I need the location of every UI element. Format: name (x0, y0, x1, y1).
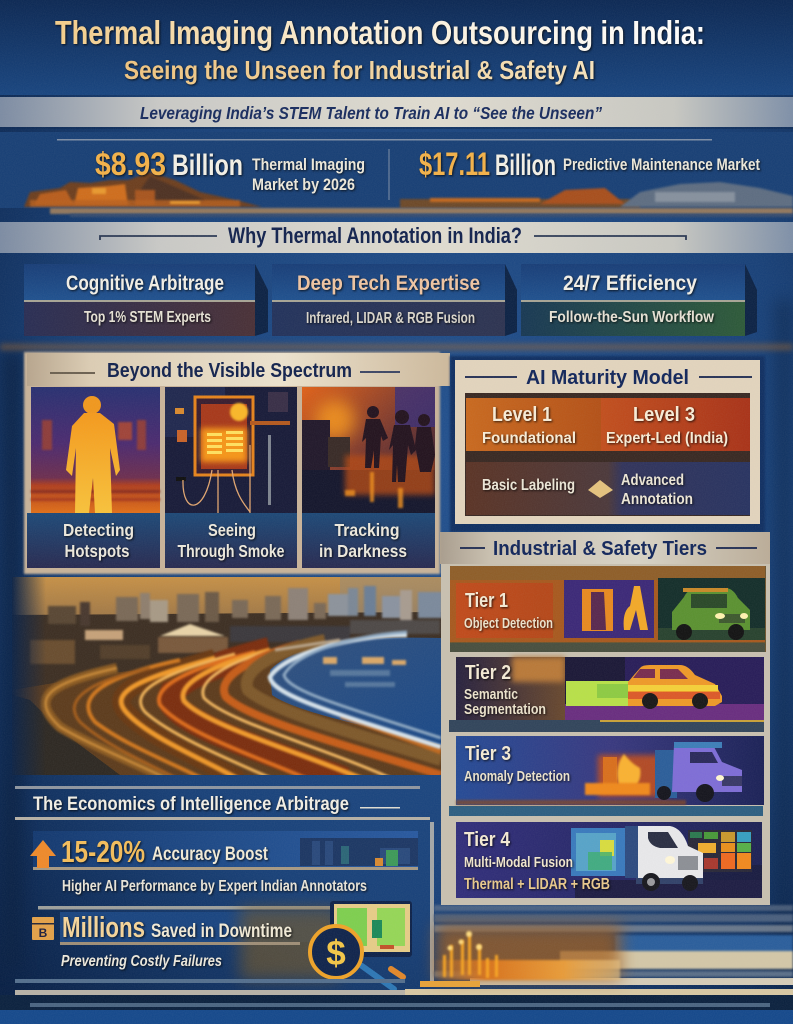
level 1 cell (466, 398, 601, 451)
comparison row: Annotation (621, 491, 693, 508)
stat: predictive maintenance market: $17.11 (419, 146, 490, 182)
thermal image: people in darkness (302, 387, 435, 513)
stat: thermal imaging market: Market by 2026 (252, 175, 355, 194)
market stats strip (0, 132, 793, 217)
subtitle: Seeing the Unseen for Industrial & Safety AI (124, 55, 595, 85)
stat: thermal imaging market (95, 146, 365, 194)
stat: predictive maintenance market: Billion (495, 149, 556, 182)
tier 3: Tier 3 (465, 743, 511, 765)
tier 2: Segmentation (464, 702, 546, 718)
section heading: economics of intelligence arbitrage: The Economics of Intelligence Arbitrage (33, 794, 349, 815)
comparison row (466, 462, 750, 515)
tier 2 (449, 657, 764, 732)
panel: accuracy boost: Higher AI Performance by Expert Indian Annotators (62, 878, 367, 895)
left edge fade (12, 577, 46, 775)
thermal skyline right (400, 182, 793, 208)
stat: thermal imaging market: Thermal Imaging (252, 155, 365, 174)
panel: millions saved in downtime: Preventing Costly Failures (61, 953, 222, 970)
tier 1 (450, 566, 765, 652)
level 3 cell: Level 3 (633, 404, 695, 426)
purple truck (655, 742, 742, 802)
tier 4: Thermal + LIDAR + RGB (464, 876, 610, 893)
icon: magnifying glass with dollar (310, 926, 403, 989)
panel: deep tech expertise: Deep Tech Expertise (297, 272, 480, 295)
caption: seeing through smoke (165, 513, 297, 568)
tier 2: Semantic (464, 687, 518, 703)
thermal image: person (31, 387, 160, 513)
panel: deep tech expertise (272, 264, 517, 336)
section heading: economics of intelligence arbitrage (15, 786, 430, 820)
panel: 24/7 efficiency: 24/7 Efficiency (563, 272, 697, 295)
comparison row: Basic Labeling (482, 477, 575, 494)
stat: thermal imaging market: Billion (172, 149, 243, 182)
panel: ai maturity model (450, 356, 765, 532)
caption: seeing through smoke: Through Smoke (178, 541, 285, 561)
mid-ground city (12, 612, 441, 690)
tier 1: Tier 1 (465, 590, 508, 612)
tagline banner (0, 97, 793, 129)
icon: monitor with floor plan (330, 901, 412, 957)
thermal bar chart decoration (420, 905, 793, 987)
icon: magnifying glass with dollar: $ (326, 934, 346, 973)
heading: AI Maturity Model (526, 366, 689, 389)
panel: cognitive arbitrage: Top 1% STEM Experts (84, 309, 211, 326)
caption: tracking in darkness (302, 513, 435, 568)
thermal people thumbnail (564, 580, 654, 638)
fire and equipment (585, 754, 668, 797)
tier 1: Object Detection (464, 616, 553, 632)
panel: accuracy boost: 15-20% (61, 834, 145, 869)
panel: tiers frame (441, 564, 770, 905)
caption: detecting hotspots (27, 513, 160, 568)
tagline banner: Leveraging India’s STEM Talent to Train AI to “See the Unseen” (140, 103, 602, 123)
tier 2: Tier 2 (465, 662, 511, 684)
dark foreground (12, 695, 120, 775)
thermal image: electrical panel (165, 387, 297, 513)
panel: millions saved in downtime: Saved in Downtime (151, 921, 292, 942)
color grid display (688, 830, 752, 872)
panel: millions saved in downtime: Millions (62, 912, 145, 944)
panel: deep tech expertise: Infrared, LIDAR & RGB Fusion (306, 310, 475, 327)
panel: 24/7 efficiency: Follow-the-Sun Workflow (549, 309, 715, 326)
panel frame divider and bottom stripes (15, 822, 793, 995)
icon: calendar box: B (39, 926, 48, 940)
caption: seeing through smoke: Seeing (208, 520, 256, 540)
section heading: industrial and safety tiers: Industrial & Safety Tiers (493, 537, 707, 560)
white truck (571, 826, 703, 891)
thermal skyline left (24, 172, 262, 207)
illustration: city and highway (12, 577, 442, 780)
blue water (270, 638, 441, 745)
tier 4 (456, 822, 762, 898)
icon: diamond arrow (588, 480, 613, 498)
caption: detecting hotspots: Detecting (63, 520, 134, 540)
section heading: industrial and safety tiers (440, 532, 770, 564)
level 1 cell: Level 1 (492, 404, 552, 426)
caption: tracking in darkness: Tracking (334, 520, 400, 540)
tier 3: Anomaly Detection (464, 769, 570, 785)
caption: tracking in darkness: in Darkness (319, 541, 407, 561)
icon: up arrow (30, 840, 56, 868)
heading: Beyond the Visible Spectrum (107, 359, 352, 382)
level 1 cell: Foundational (482, 430, 576, 447)
stat: predictive maintenance market (419, 146, 760, 182)
level 3 cell (601, 398, 750, 451)
level 3 cell: Expert-Led (India) (606, 430, 728, 447)
highway ribbons (46, 632, 441, 780)
tier 3 (449, 736, 764, 816)
tier 4: Multi-Modal Fusion (464, 855, 573, 871)
caption: detecting hotspots: Hotspots (64, 541, 130, 561)
panel: accuracy boost: Accuracy Boost (152, 844, 269, 865)
segmented block and car (566, 665, 722, 709)
green vehicle (658, 578, 765, 640)
tier 4: Tier 4 (464, 829, 511, 851)
windows decoration (300, 838, 418, 866)
icon: calendar box (32, 917, 54, 940)
panel: 24/7 efficiency (521, 264, 757, 336)
stat: thermal imaging market: $8.93 (95, 146, 166, 182)
panel: accuracy boost (30, 831, 418, 895)
title (55, 14, 705, 85)
comparison row: Advanced (621, 472, 684, 489)
section heading: why thermal annotation: Why Thermal Annotation in India? (228, 223, 522, 248)
panel: millions saved in downtime (32, 901, 412, 989)
panel: cognitive arbitrage: Cognitive Arbitrage (66, 272, 224, 295)
section heading: why thermal annotation (0, 222, 793, 253)
panel: cognitive arbitrage (24, 264, 268, 336)
panel: beyond the visible spectrum (0, 344, 793, 574)
